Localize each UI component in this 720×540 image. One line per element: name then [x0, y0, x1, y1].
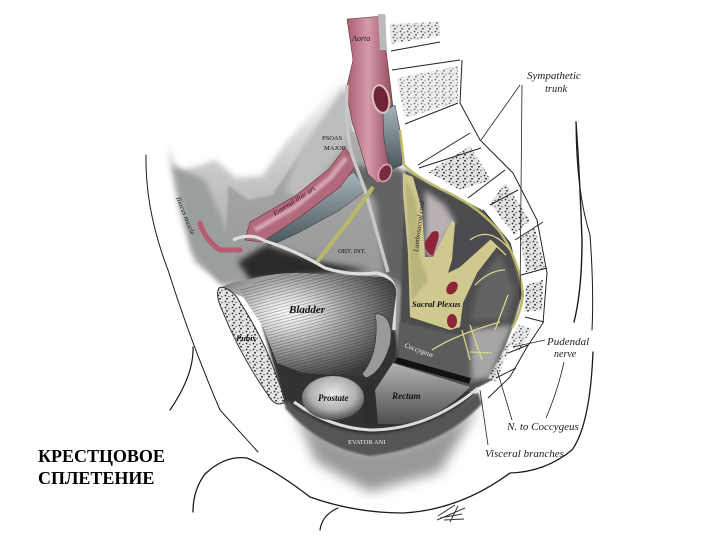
label: nerve to coccygeus: N. to Coccygeus: [506, 421, 579, 433]
obturator nerve: [317, 187, 373, 262]
dark backing of the pelvic floor: [262, 325, 478, 440]
external iliac vein: [256, 172, 366, 246]
label: levator ani: EVATOR ANI: [348, 439, 386, 446]
body contour lines: [146, 122, 593, 530]
seminal vesicle: [362, 314, 391, 378]
bladder: [220, 273, 396, 378]
leader line for nerve to coccygeus: [497, 370, 512, 420]
label: nerve: nerve: [554, 349, 577, 360]
sympathetic trunk nerve along the sacrum: [400, 130, 523, 328]
arteries in plexus: lower: [447, 314, 457, 328]
arteries in plexus: middle: [444, 279, 460, 297]
label: rectum: Rectum: [391, 391, 420, 401]
label: prostate: Prostate: [318, 393, 349, 403]
dark rectum band: [396, 360, 470, 381]
vertebra: top: [390, 22, 440, 44]
leader line for pudendal nerve: [513, 340, 564, 418]
arteries in plexus: upper: [425, 231, 439, 256]
iliac lumen: [376, 162, 394, 184]
ureter: [347, 85, 388, 272]
label: visceral branches: Visceral branches: [485, 448, 564, 460]
rectum: [373, 363, 470, 424]
label: muscle name on the left wall: Iliacus muscle: [174, 195, 197, 236]
label: trunk: trunk: [545, 84, 568, 95]
external iliac artery: [245, 148, 357, 242]
external iliac artery: External iliac art.: [271, 184, 318, 218]
label: aorta: Aorta: [351, 34, 370, 43]
caption: sacral plexus in Russian: КРЕСТЦОВОЕ: [38, 446, 165, 466]
spine and sacrum: [389, 18, 547, 398]
vena cava: [383, 105, 402, 170]
perineal hair tuft: [437, 505, 465, 522]
vertebra: coccyx: [488, 325, 532, 382]
vertebra: sacral 1: [428, 146, 491, 190]
vertebra: sacral 4: [524, 280, 543, 312]
caption: sacral plexus in Russian: СПЛЕТЕНИЕ: [38, 468, 154, 488]
aorta and common iliac arteries: [346, 14, 402, 184]
prostate: [302, 376, 364, 420]
vas deferens: [233, 236, 395, 330]
pelvic cavity and sacral interior: [395, 170, 523, 392]
label: obturator internus: OBT. INT.: [338, 248, 366, 255]
leader lines for sympathetic trunk: [481, 85, 522, 300]
leader line for visceral branches: [480, 390, 488, 445]
vertebra: sacral 3: [520, 228, 545, 272]
label: pudendal nerve: Pudendal: [546, 336, 589, 348]
label: psoas magnus: PSOAS: [322, 135, 343, 142]
label: coccygeus: Coccygeus: [403, 341, 435, 359]
sacral plexus: [403, 173, 497, 330]
label: pubis: Pubis: [236, 333, 257, 343]
label: bladder: Bladder: [288, 304, 326, 316]
caption: sacral plexus in Russian: [38, 446, 165, 488]
pelvic wall muscles: [167, 72, 412, 345]
pudendal and visceral nerve branches: [432, 234, 510, 360]
label: lumbosacral cord: Lumbosacral cord: [412, 200, 426, 253]
label: psoas major: MAJOR: [324, 145, 347, 152]
vertebra: sacral 2: [490, 183, 530, 235]
aortic lumen: [370, 84, 392, 114]
label: sacral plexus: Sacral Plexus: [412, 299, 461, 309]
dark tissue between prostate and rectum: [364, 378, 378, 424]
pubis bone: [218, 287, 284, 404]
vertebra: 5th lumbar: [397, 66, 458, 118]
levator ani and pelvic floor: [285, 388, 482, 492]
small epigastric vessel: [200, 223, 240, 250]
label: sympathetic trunk: Sympathetic: [527, 70, 581, 82]
